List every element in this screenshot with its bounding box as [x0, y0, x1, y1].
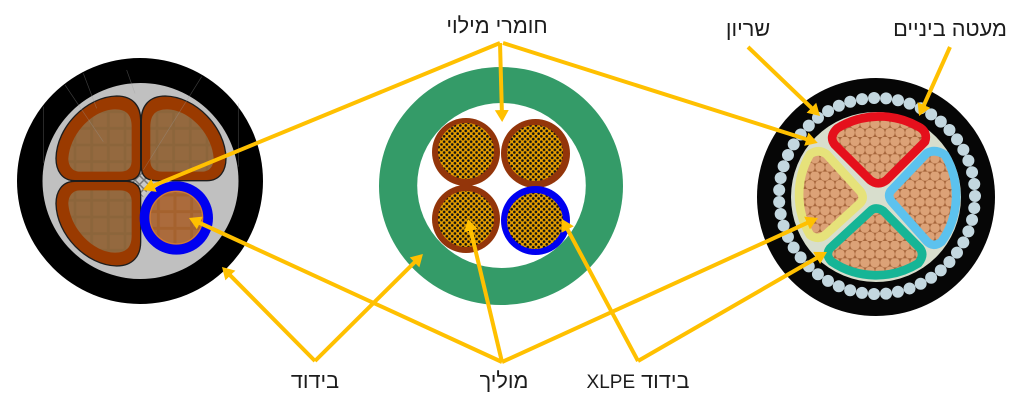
- arrows: conductor: [194, 220, 812, 362]
- core: top right sector: [141, 96, 226, 181]
- label: insulation: בידוד: [291, 368, 339, 393]
- insulation: green sheath: [379, 67, 623, 305]
- arrows: XLPE insulation: [565, 224, 822, 361]
- core: blue: [889, 151, 956, 245]
- label: XLPE insulation: בידוד XLPE: [587, 368, 689, 393]
- core: top left sector: [56, 96, 141, 181]
- core: round core with blue insulation: [140, 181, 213, 255]
- core: green: [828, 209, 922, 275]
- filler: central mesh: [128, 166, 155, 197]
- label: bedding: מעטה ביניים: [893, 16, 1007, 41]
- filler: grey inner area: [42, 83, 238, 279]
- faint scratch lines: [43, 70, 238, 170]
- label: conductor: מוליך: [480, 368, 528, 393]
- core: top left: [432, 118, 500, 186]
- arrow: armour: [748, 47, 816, 112]
- arrow: bedding: [922, 47, 950, 110]
- cable: right, photographed armoured cable: [757, 78, 995, 316]
- core: red: [832, 116, 926, 183]
- label: filler materials: חומרי מילוי: [446, 13, 548, 38]
- core: top right: [501, 119, 570, 188]
- armour: ring of steel wires: [779, 98, 975, 294]
- inner filler: [791, 112, 961, 282]
- core: bottom left sector: [56, 181, 141, 266]
- cores: [799, 116, 956, 275]
- core: bottom left: [432, 185, 500, 253]
- outer sheath: [757, 78, 995, 316]
- arrows: insulation: [226, 258, 419, 361]
- arrows: filler materials: [148, 43, 812, 188]
- cable: left, four-core sector cable: [17, 58, 263, 304]
- core: bottom right with blue insulation: [501, 186, 570, 255]
- insulation: outer black sheath: [17, 58, 263, 304]
- cavity: white interior: [417, 103, 586, 268]
- core group: sector conductors: [43, 70, 238, 266]
- label: armour: שריון: [726, 16, 770, 41]
- cable: middle, four round cores: [379, 67, 623, 305]
- core: yellow: [799, 151, 863, 238]
